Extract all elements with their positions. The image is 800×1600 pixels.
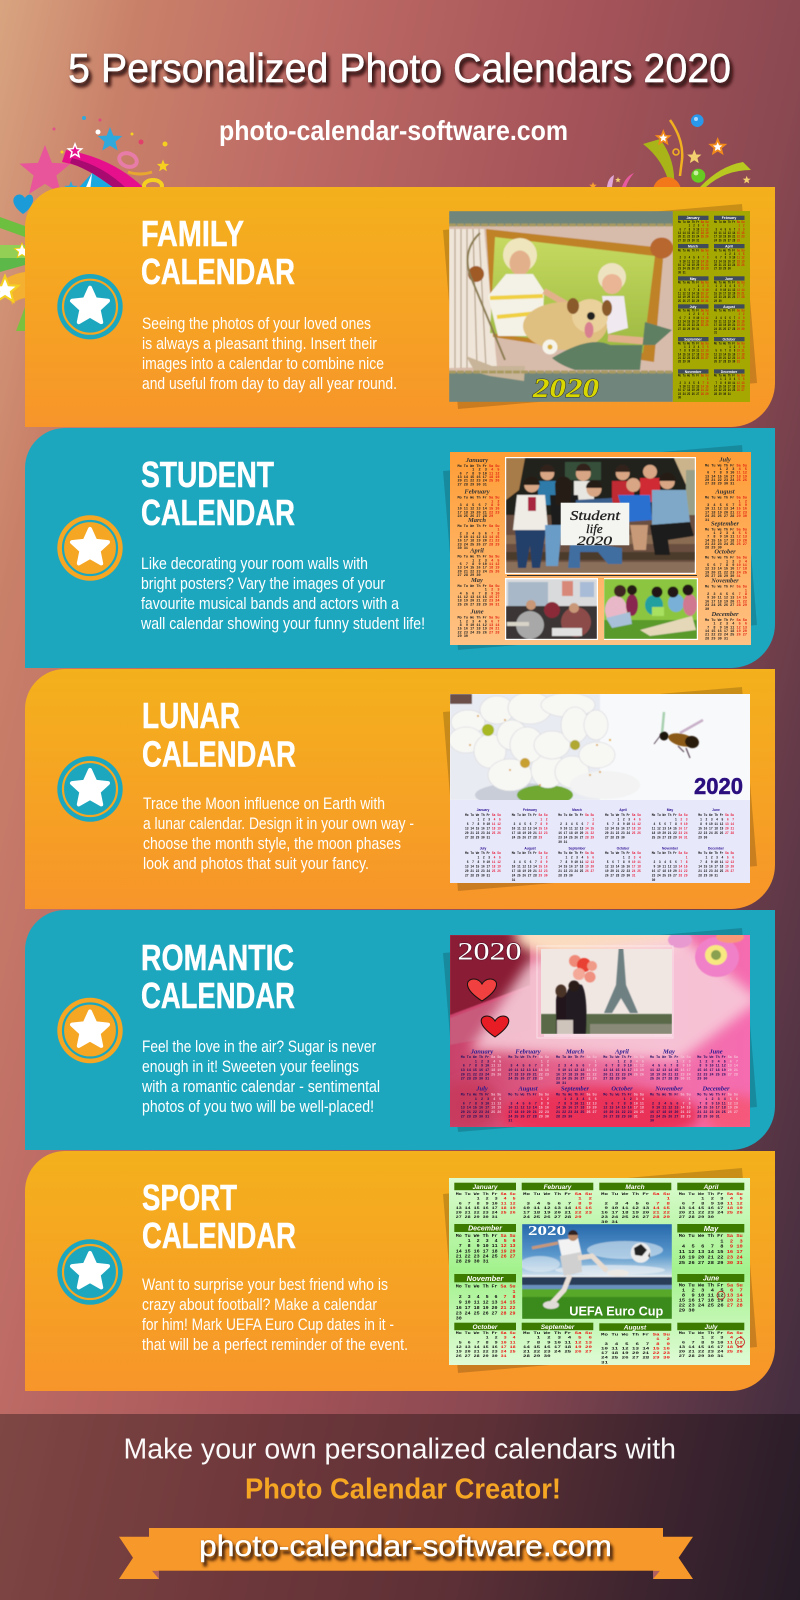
heading bbox=[141, 454, 295, 533]
month grids: July bbox=[475, 1086, 488, 1093]
month grids: November bbox=[654, 1086, 683, 1093]
left confetti decoration bbox=[0, 116, 169, 331]
student calendar image: September bbox=[711, 520, 740, 527]
family calendar image: January bbox=[686, 216, 700, 220]
description: bright posters? Vary the images of your bbox=[141, 574, 385, 593]
family calendar image: July bbox=[690, 305, 697, 309]
blossom photo bbox=[449, 692, 640, 807]
heading: ROMANTIC bbox=[141, 937, 294, 978]
heading: CALENDAR bbox=[141, 251, 295, 292]
football photo bbox=[520, 1224, 672, 1319]
website link: photo-calendar-software.com bbox=[219, 115, 568, 146]
ribbon banner bbox=[119, 1528, 693, 1579]
sport calendar image: July bbox=[704, 1324, 718, 1331]
student calendar image: August bbox=[714, 489, 735, 496]
family calendar image: August bbox=[723, 305, 736, 309]
description: for him! Mark UEFA Euro Cup dates in it - bbox=[142, 1315, 394, 1334]
product name: Photo Calendar Creator! bbox=[245, 1473, 561, 1505]
month grids: October bbox=[611, 1086, 633, 1093]
family calendar image: December bbox=[721, 370, 738, 374]
heading: CALENDAR bbox=[141, 975, 295, 1016]
title: 5 Personalized Photo Calendars 2020 bbox=[68, 45, 731, 91]
student calendar image bbox=[443, 445, 757, 650]
family calendar image: June bbox=[725, 277, 733, 281]
star badge bbox=[57, 515, 123, 581]
year: 2020 bbox=[694, 773, 743, 799]
description: Feel the love in the air? Sugar is never bbox=[142, 1037, 376, 1056]
sport calendar image: August bbox=[623, 1325, 647, 1332]
student calendar image: January bbox=[465, 457, 488, 464]
star badge bbox=[57, 998, 123, 1063]
footer band bbox=[0, 1414, 800, 1600]
description: photos of you two will be well-placed! bbox=[142, 1097, 374, 1116]
description: a lunar calendar. Design it in your own way - bbox=[143, 814, 414, 833]
star badge bbox=[57, 274, 123, 339]
student calendar image: October bbox=[714, 549, 736, 556]
heading: LUNAR bbox=[142, 695, 240, 736]
football photo: UEFA Euro Cup bbox=[569, 1305, 664, 1319]
classroom photo bbox=[505, 578, 598, 640]
description bbox=[143, 794, 414, 873]
sport calendar image: September bbox=[541, 1324, 575, 1331]
right confetti decoration bbox=[589, 114, 751, 205]
description: wall calendar showing your funny student life! bbox=[140, 614, 425, 633]
lunar calendar image bbox=[443, 687, 757, 891]
call to action: Make your own personalized calendars with bbox=[124, 1433, 676, 1465]
month grids: August bbox=[524, 846, 537, 850]
panel: lunar calendar bbox=[25, 669, 775, 909]
football photo: 2020 bbox=[528, 1224, 566, 1239]
month grids bbox=[461, 1048, 739, 1124]
description: crazy about football? Make a calendar bbox=[142, 1295, 377, 1314]
heading: FAMILY bbox=[141, 213, 244, 254]
month grids: March bbox=[572, 808, 582, 812]
month grids bbox=[465, 808, 734, 883]
family calendar image: February bbox=[722, 216, 736, 220]
sport calendar image bbox=[443, 1168, 757, 1373]
student calendar image: December bbox=[710, 611, 739, 618]
main group photo: Student bbox=[570, 509, 621, 524]
family calendar image: September bbox=[684, 338, 702, 342]
photo: couple and tower bbox=[537, 945, 673, 1038]
heading bbox=[142, 695, 296, 774]
sport calendar image: February bbox=[544, 1184, 572, 1191]
hearts bbox=[467, 979, 509, 1037]
month grids: February bbox=[515, 1048, 541, 1055]
month grids: June bbox=[712, 808, 720, 812]
park photo bbox=[604, 578, 698, 640]
month grids: June bbox=[708, 1048, 723, 1055]
family calendar image: March bbox=[688, 244, 698, 248]
month grids: July bbox=[480, 846, 486, 850]
description: images into a calendar to combine nice bbox=[142, 354, 384, 373]
family calendar image: April bbox=[725, 244, 733, 248]
description bbox=[140, 554, 425, 633]
student calendar image: May bbox=[470, 577, 483, 584]
description: is always a pleasant thing. Insert their bbox=[142, 334, 377, 353]
description: that will be a perfect reminder of the event. bbox=[142, 1335, 408, 1354]
description bbox=[142, 1275, 408, 1354]
description: look and photos that suit your fancy. bbox=[143, 854, 369, 873]
sport calendar image: January bbox=[473, 1184, 498, 1191]
sport calendar image: March bbox=[625, 1184, 645, 1191]
bee bbox=[654, 712, 703, 758]
panel: romantic calendar bbox=[25, 907, 775, 1150]
footer website link: photo-calendar-software.com bbox=[199, 1530, 612, 1563]
star badge bbox=[57, 1239, 123, 1305]
sport calendar image: May bbox=[704, 1224, 719, 1233]
description: enough in it! Sweeten your feelings bbox=[142, 1057, 359, 1076]
main group photo: 2020 bbox=[577, 533, 613, 548]
student calendar image: July bbox=[718, 456, 731, 463]
student calendar image: February bbox=[464, 489, 490, 496]
heading: CALENDAR bbox=[142, 734, 296, 774]
month grids: October bbox=[617, 846, 630, 850]
sport calendar image: April bbox=[703, 1184, 719, 1191]
heading: CALENDAR bbox=[142, 1215, 296, 1256]
student calendar image: March bbox=[467, 517, 486, 524]
month grids: May bbox=[667, 808, 673, 812]
panel: family calendar bbox=[25, 187, 775, 427]
student calendar image: April bbox=[469, 548, 484, 555]
sport calendar image: June bbox=[703, 1276, 719, 1283]
month grids: January bbox=[477, 808, 489, 812]
month grids: April bbox=[614, 1048, 629, 1055]
description: Trace the Moon influence on Earth with bbox=[143, 794, 385, 813]
heading: SPORT bbox=[142, 1177, 237, 1218]
star badge bbox=[57, 756, 123, 822]
month grids: August bbox=[517, 1086, 538, 1093]
month grids: November bbox=[662, 846, 679, 850]
student calendar image: June bbox=[469, 609, 484, 616]
month grids: December bbox=[701, 1086, 730, 1093]
panel: student calendar bbox=[25, 428, 775, 668]
main group photo: life bbox=[586, 521, 603, 536]
description bbox=[141, 1037, 380, 1116]
year: 2020 bbox=[458, 938, 522, 966]
month grids: September bbox=[568, 846, 586, 850]
description: and useful from day to day all year round. bbox=[142, 374, 397, 393]
panel: sport calendar bbox=[25, 1151, 775, 1391]
sport calendar image: December bbox=[468, 1226, 503, 1233]
year: 2020 bbox=[532, 373, 600, 403]
month grids: January bbox=[470, 1048, 493, 1055]
description: with a romantic calendar - sentimental bbox=[141, 1077, 380, 1096]
month grids: March bbox=[565, 1048, 584, 1055]
heading: STUDENT bbox=[141, 454, 274, 495]
month grids: April bbox=[619, 808, 627, 812]
description: choose the month style, the moon phases bbox=[143, 834, 401, 853]
student calendar image: November bbox=[710, 578, 739, 585]
description: Like decorating your room walls with bbox=[141, 554, 368, 573]
heading bbox=[141, 213, 295, 292]
family calendar image: November bbox=[685, 370, 702, 374]
main group photo bbox=[505, 457, 697, 576]
description: Want to surprise your best friend who is bbox=[142, 1275, 388, 1294]
romantic calendar image bbox=[443, 928, 757, 1132]
heading: CALENDAR bbox=[141, 492, 295, 533]
month grids: May bbox=[662, 1048, 675, 1055]
month grids: September bbox=[561, 1086, 590, 1093]
description bbox=[142, 314, 397, 393]
heading bbox=[142, 1177, 296, 1256]
month grids: December bbox=[708, 846, 725, 850]
sport calendar image: October bbox=[473, 1324, 498, 1331]
description: Seeing the photos of your loved ones bbox=[142, 314, 371, 333]
flower bbox=[668, 931, 744, 977]
heading bbox=[141, 937, 295, 1016]
family calendar image: October bbox=[722, 338, 736, 342]
family calendar image: May bbox=[690, 277, 696, 281]
sport calendar image: November bbox=[467, 1274, 504, 1283]
description: favourite musical bands and actors with a bbox=[141, 594, 399, 613]
month grids: February bbox=[523, 808, 537, 812]
family calendar image bbox=[443, 204, 757, 409]
